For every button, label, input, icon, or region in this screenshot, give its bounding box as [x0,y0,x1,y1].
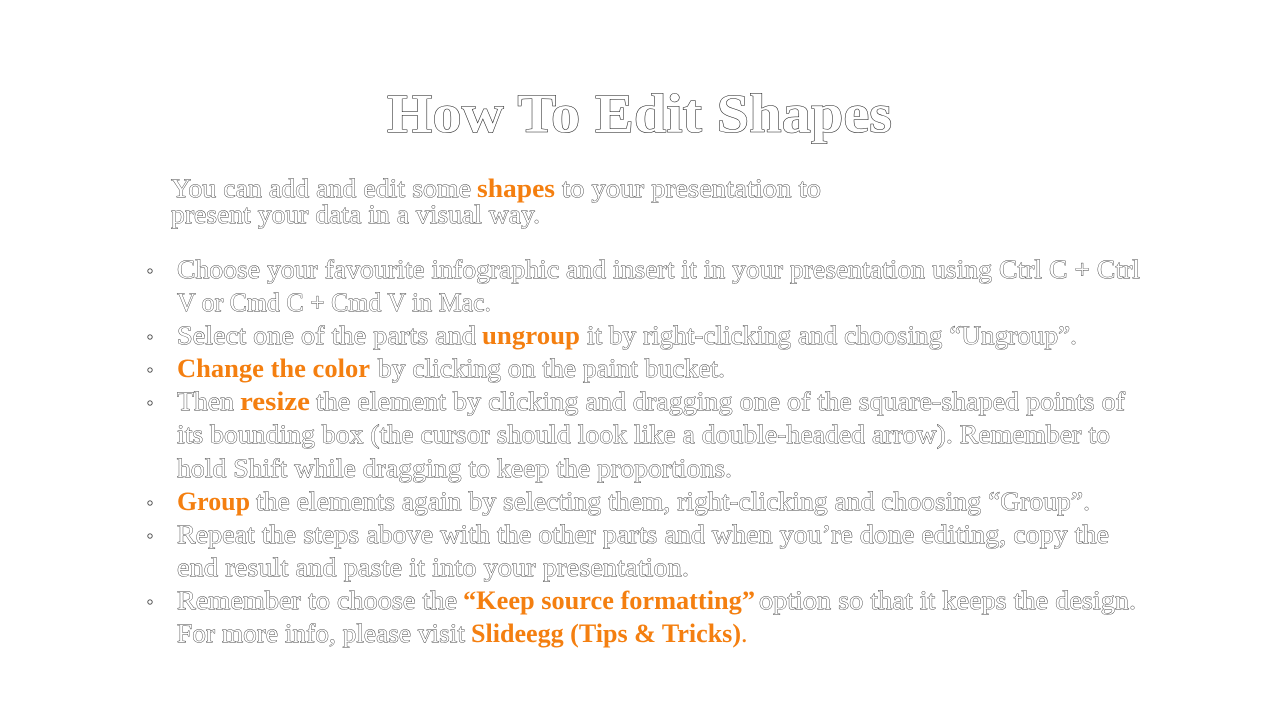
bullet 7: keep source formatting: . [741,619,748,648]
bullet 4: resize: hold Shift while dragging to keep the proportions. [177,454,732,483]
bullet 7: keep source formatting: “Keep source formatting” [463,586,755,615]
bullet list [148,255,1140,648]
bullet 3: change the color [148,354,725,383]
bullet 5: group: the elements again by selecting them, right-clicking and choosing “Group”. [256,487,1090,516]
intro text block: present your data in a visual way. [171,200,540,229]
bullet 7: keep source formatting: Slideegg (Tips & Tricks) [471,619,741,648]
intro text block [171,174,821,229]
title: How To Edit Shapes [387,83,892,144]
intro text block: You can add and edit some [171,174,471,203]
bullet 4: resize [148,387,1125,483]
bullet 2: ungroup: it by right-clicking and choosing “Ungroup”. [587,321,1077,350]
bullet 7: keep source formatting: option so that it keeps the design. [759,586,1136,615]
bullet 7: keep source formatting: Remember to choose the [177,586,457,615]
intro text block: to your presentation to [562,174,821,203]
bullet 6: repeat [148,520,1109,582]
bullet 3: change the color: Change the color [177,354,370,383]
intro text block: shapes [477,174,555,203]
bullet 2: ungroup: ungroup [482,321,580,350]
bullet 4: resize: Then [177,387,234,416]
bullet 1: choose infographic: Choose your favourite infographic and insert it in your presentation using Ctrl C + Ctrl [177,255,1140,284]
bullet 2: ungroup [148,321,1077,350]
bullet 4: resize: the element by clicking and dragging one of the square-shaped points of [316,387,1125,416]
bullet 6: repeat: end result and paste it into your presentation. [177,553,689,582]
bullet 6: repeat: Repeat the steps above with the other parts and when you’re done editing, copy the [177,520,1109,549]
bullet 7: keep source formatting [148,586,1136,648]
bullet 7: keep source formatting: For more info, please visit [177,619,466,648]
bullet 1: choose infographic [148,255,1140,317]
bullet 2: ungroup: Select one of the parts and [177,321,476,350]
bullet 5: group: Group [177,487,250,516]
bullet 3: change the color: by clicking on the paint bucket. [378,354,725,383]
bullet 1: choose infographic: V or Cmd C + Cmd V in Mac. [177,288,491,317]
bullet 4: resize: resize [240,387,310,416]
bullet 4: resize: its bounding box (the cursor should look like a double-headed arrow). Remember to [177,420,1110,449]
